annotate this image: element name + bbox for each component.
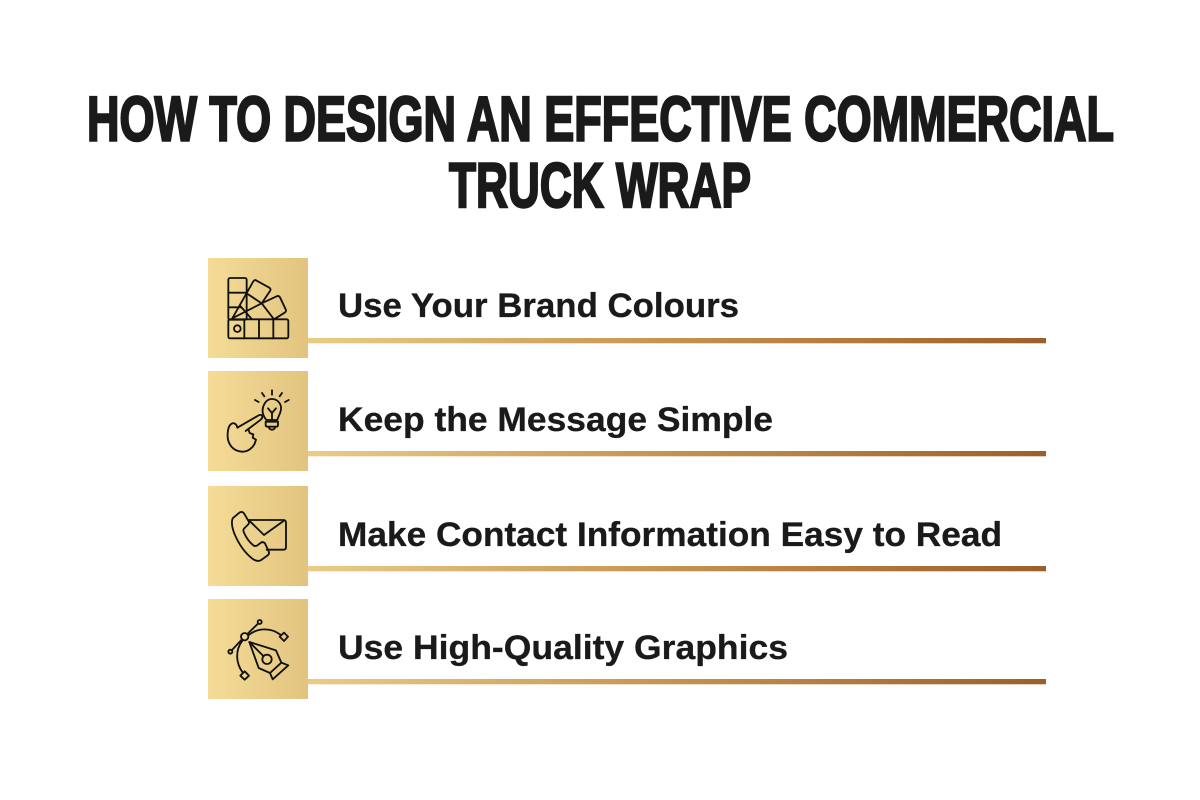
divider bar xyxy=(308,338,1046,343)
title xyxy=(87,84,1114,221)
divider bar xyxy=(308,451,1046,456)
label: Use Your Brand Colours xyxy=(338,287,739,325)
divider bar xyxy=(308,566,1046,571)
item: Use Your Brand Colours xyxy=(208,258,1046,358)
label: Keep the Message Simple xyxy=(338,401,773,439)
item: Keep the Message Simple xyxy=(208,371,1046,471)
icon tile: hand pointing at light bulb xyxy=(208,371,308,471)
item: Make Contact Information Easy to Read xyxy=(208,486,1046,586)
label: Make Contact Information Easy to Read xyxy=(338,516,1002,554)
item: Use High-Quality Graphics xyxy=(208,599,1046,699)
icon tile: telephone and envelope xyxy=(208,486,308,586)
title: TRUCK WRAP xyxy=(449,151,751,221)
label: Use High-Quality Graphics xyxy=(338,629,788,667)
divider bar xyxy=(308,679,1046,684)
icon tile: colour swatches xyxy=(208,258,308,358)
icon tile: pen tool with bezier curves xyxy=(208,599,308,699)
